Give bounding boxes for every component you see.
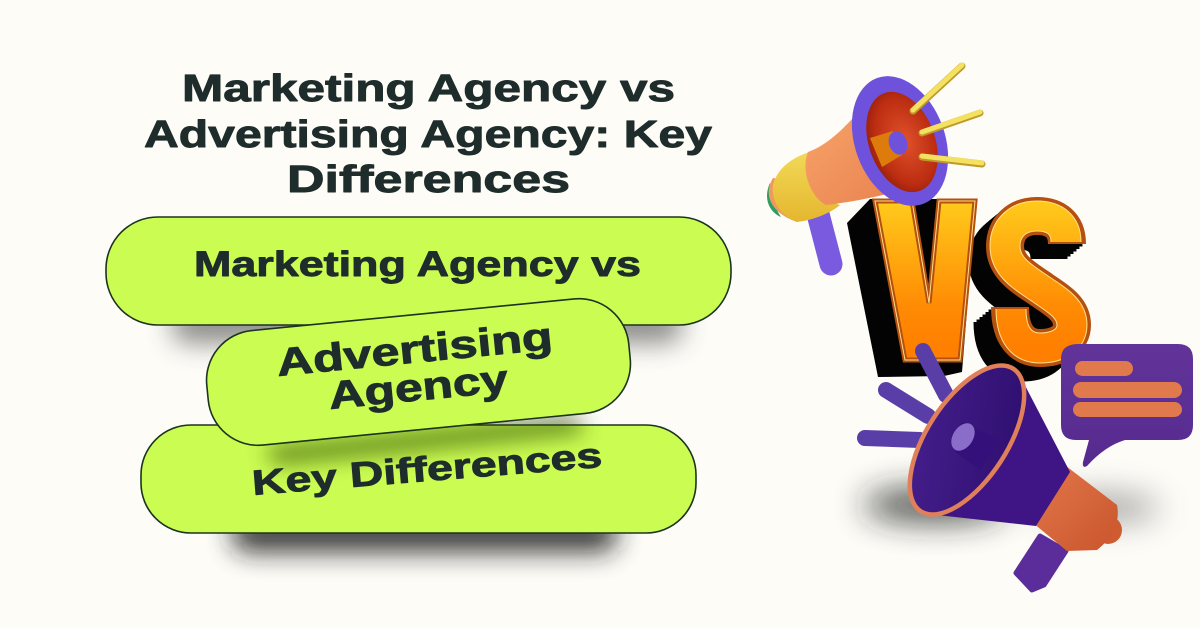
S extrusion bbox=[987, 218, 1069, 363]
icon: orange megaphone bbox=[767, 63, 982, 264]
pill: Marketing Agency vs bbox=[106, 217, 731, 325]
shadow from middle pill bbox=[265, 416, 585, 464]
letter S bbox=[1005, 216, 1072, 348]
VS lettering bbox=[847, 199, 1072, 377]
title: Differences bbox=[287, 159, 570, 201]
icon: purple megaphone bbox=[865, 347, 1122, 590]
megaphone rim bbox=[835, 63, 965, 219]
megaphone interior bbox=[853, 82, 951, 202]
icon: speech bubble bbox=[1061, 344, 1193, 467]
pill: Marketing Agency vs: Marketing Agency vs bbox=[194, 245, 641, 284]
megaphone handle bbox=[818, 214, 831, 264]
pill: Key Differences bbox=[141, 416, 696, 533]
megaphone driver bbox=[870, 131, 902, 167]
neck bbox=[1033, 466, 1118, 551]
megaphone back cap bbox=[767, 183, 781, 217]
pill: Advertising Agency: Agency bbox=[327, 358, 510, 418]
megaphone collar bbox=[773, 150, 840, 222]
sound rays bbox=[865, 351, 946, 440]
back cap bbox=[1094, 516, 1122, 544]
V extrusion bbox=[847, 199, 976, 377]
pill: Advertising Agency bbox=[202, 294, 635, 450]
megaphone cone bbox=[805, 118, 894, 205]
pill: Key Differences: Key Differences bbox=[251, 436, 604, 503]
title: Marketing Agency vs bbox=[182, 68, 675, 110]
shadow under top pill bbox=[172, 305, 682, 343]
shadow under bottom pill bbox=[232, 512, 617, 552]
rim and opening bbox=[887, 347, 1047, 533]
letter V bbox=[875, 201, 975, 360]
cone body bbox=[937, 372, 1070, 526]
title: Advertising Agency: Key bbox=[144, 114, 712, 156]
pill: Advertising Agency: Advertising bbox=[275, 315, 555, 385]
bubble lines bbox=[1073, 361, 1182, 417]
title bbox=[144, 68, 712, 201]
handle bbox=[1016, 536, 1066, 590]
panel: stacked pills bbox=[106, 217, 731, 552]
inner driver bbox=[955, 422, 1000, 470]
ground shadow behind lower megaphone bbox=[863, 488, 1160, 522]
sound lines bbox=[913, 65, 982, 164]
